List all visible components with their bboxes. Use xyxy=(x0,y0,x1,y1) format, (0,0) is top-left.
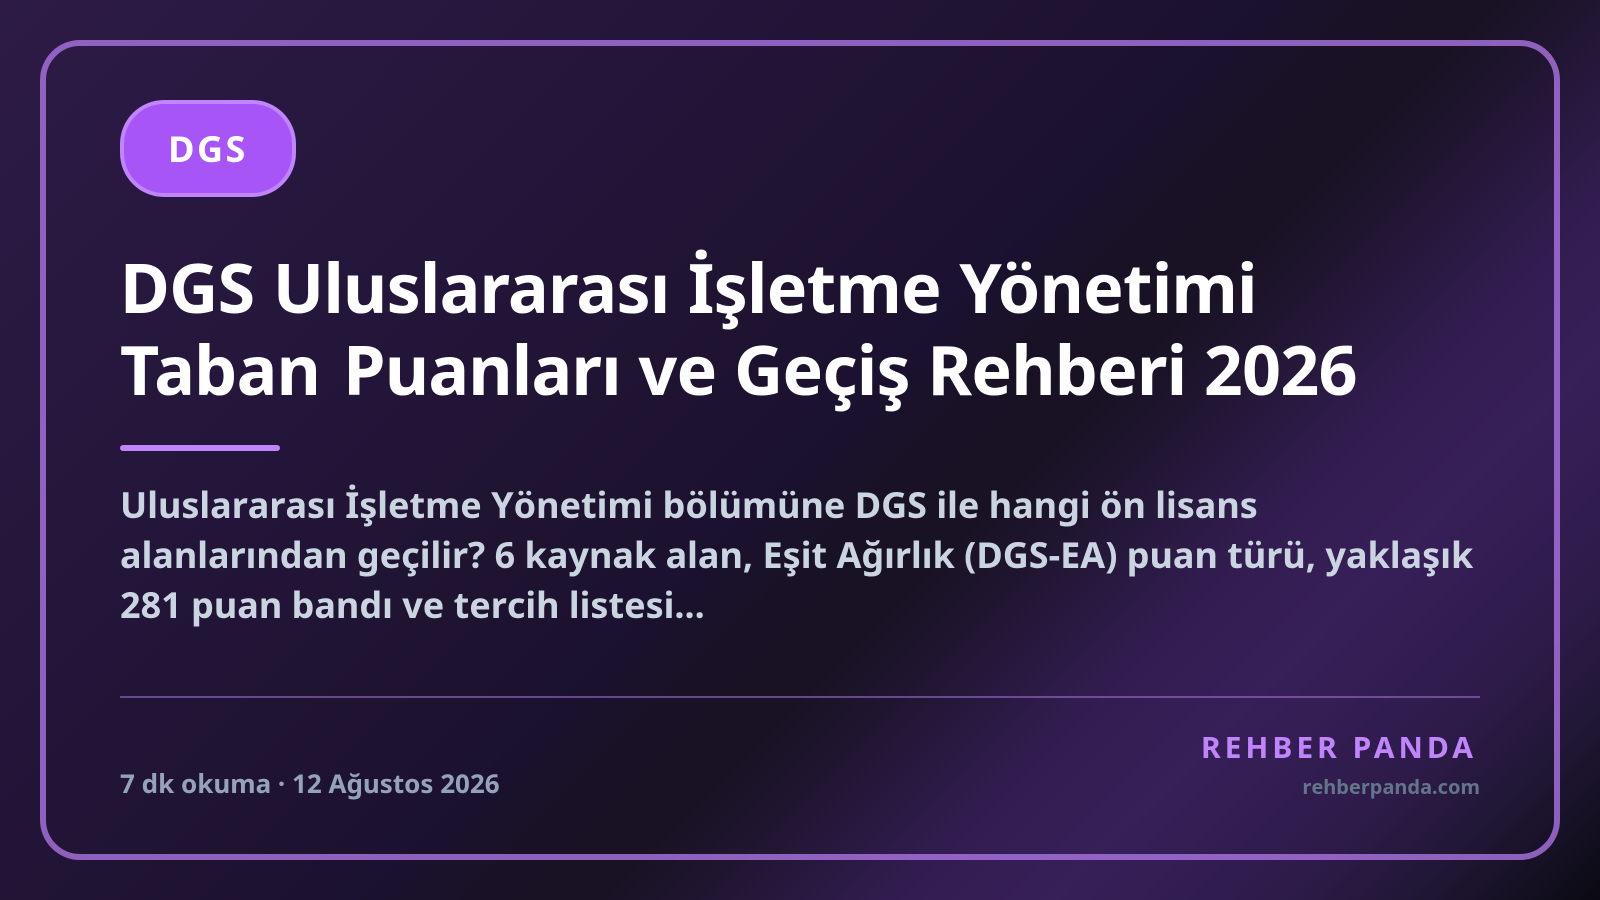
website: rehberpanda.com xyxy=(1302,773,1480,800)
footer divider xyxy=(120,696,1480,698)
title: DGS Uluslararası İşletme Yönetimi xyxy=(120,240,1257,333)
description: 281 puan bandı ve tercih listesi... xyxy=(120,580,705,629)
description: alanlarından geçilir? 6 kaynak alan, Eşit Ağırlık (DGS-EA) puan türü, yaklaşık xyxy=(120,530,1473,579)
description: Uluslararası İşletme Yönetimi bölümüne DGS ile hangi ön lisans xyxy=(120,480,1258,529)
accent bar xyxy=(120,445,280,451)
reading time and date: 7 dk okuma · 12 Ağustos 2026 xyxy=(120,765,500,801)
brand name: REHBER PANDA xyxy=(1201,726,1477,767)
badge: DGS xyxy=(120,100,296,197)
title: Taban Puanları ve Geçiş Rehberi 2026 xyxy=(120,322,1357,415)
badge: DGS: DGS xyxy=(168,124,248,173)
description xyxy=(120,480,1474,629)
title xyxy=(120,240,1357,415)
